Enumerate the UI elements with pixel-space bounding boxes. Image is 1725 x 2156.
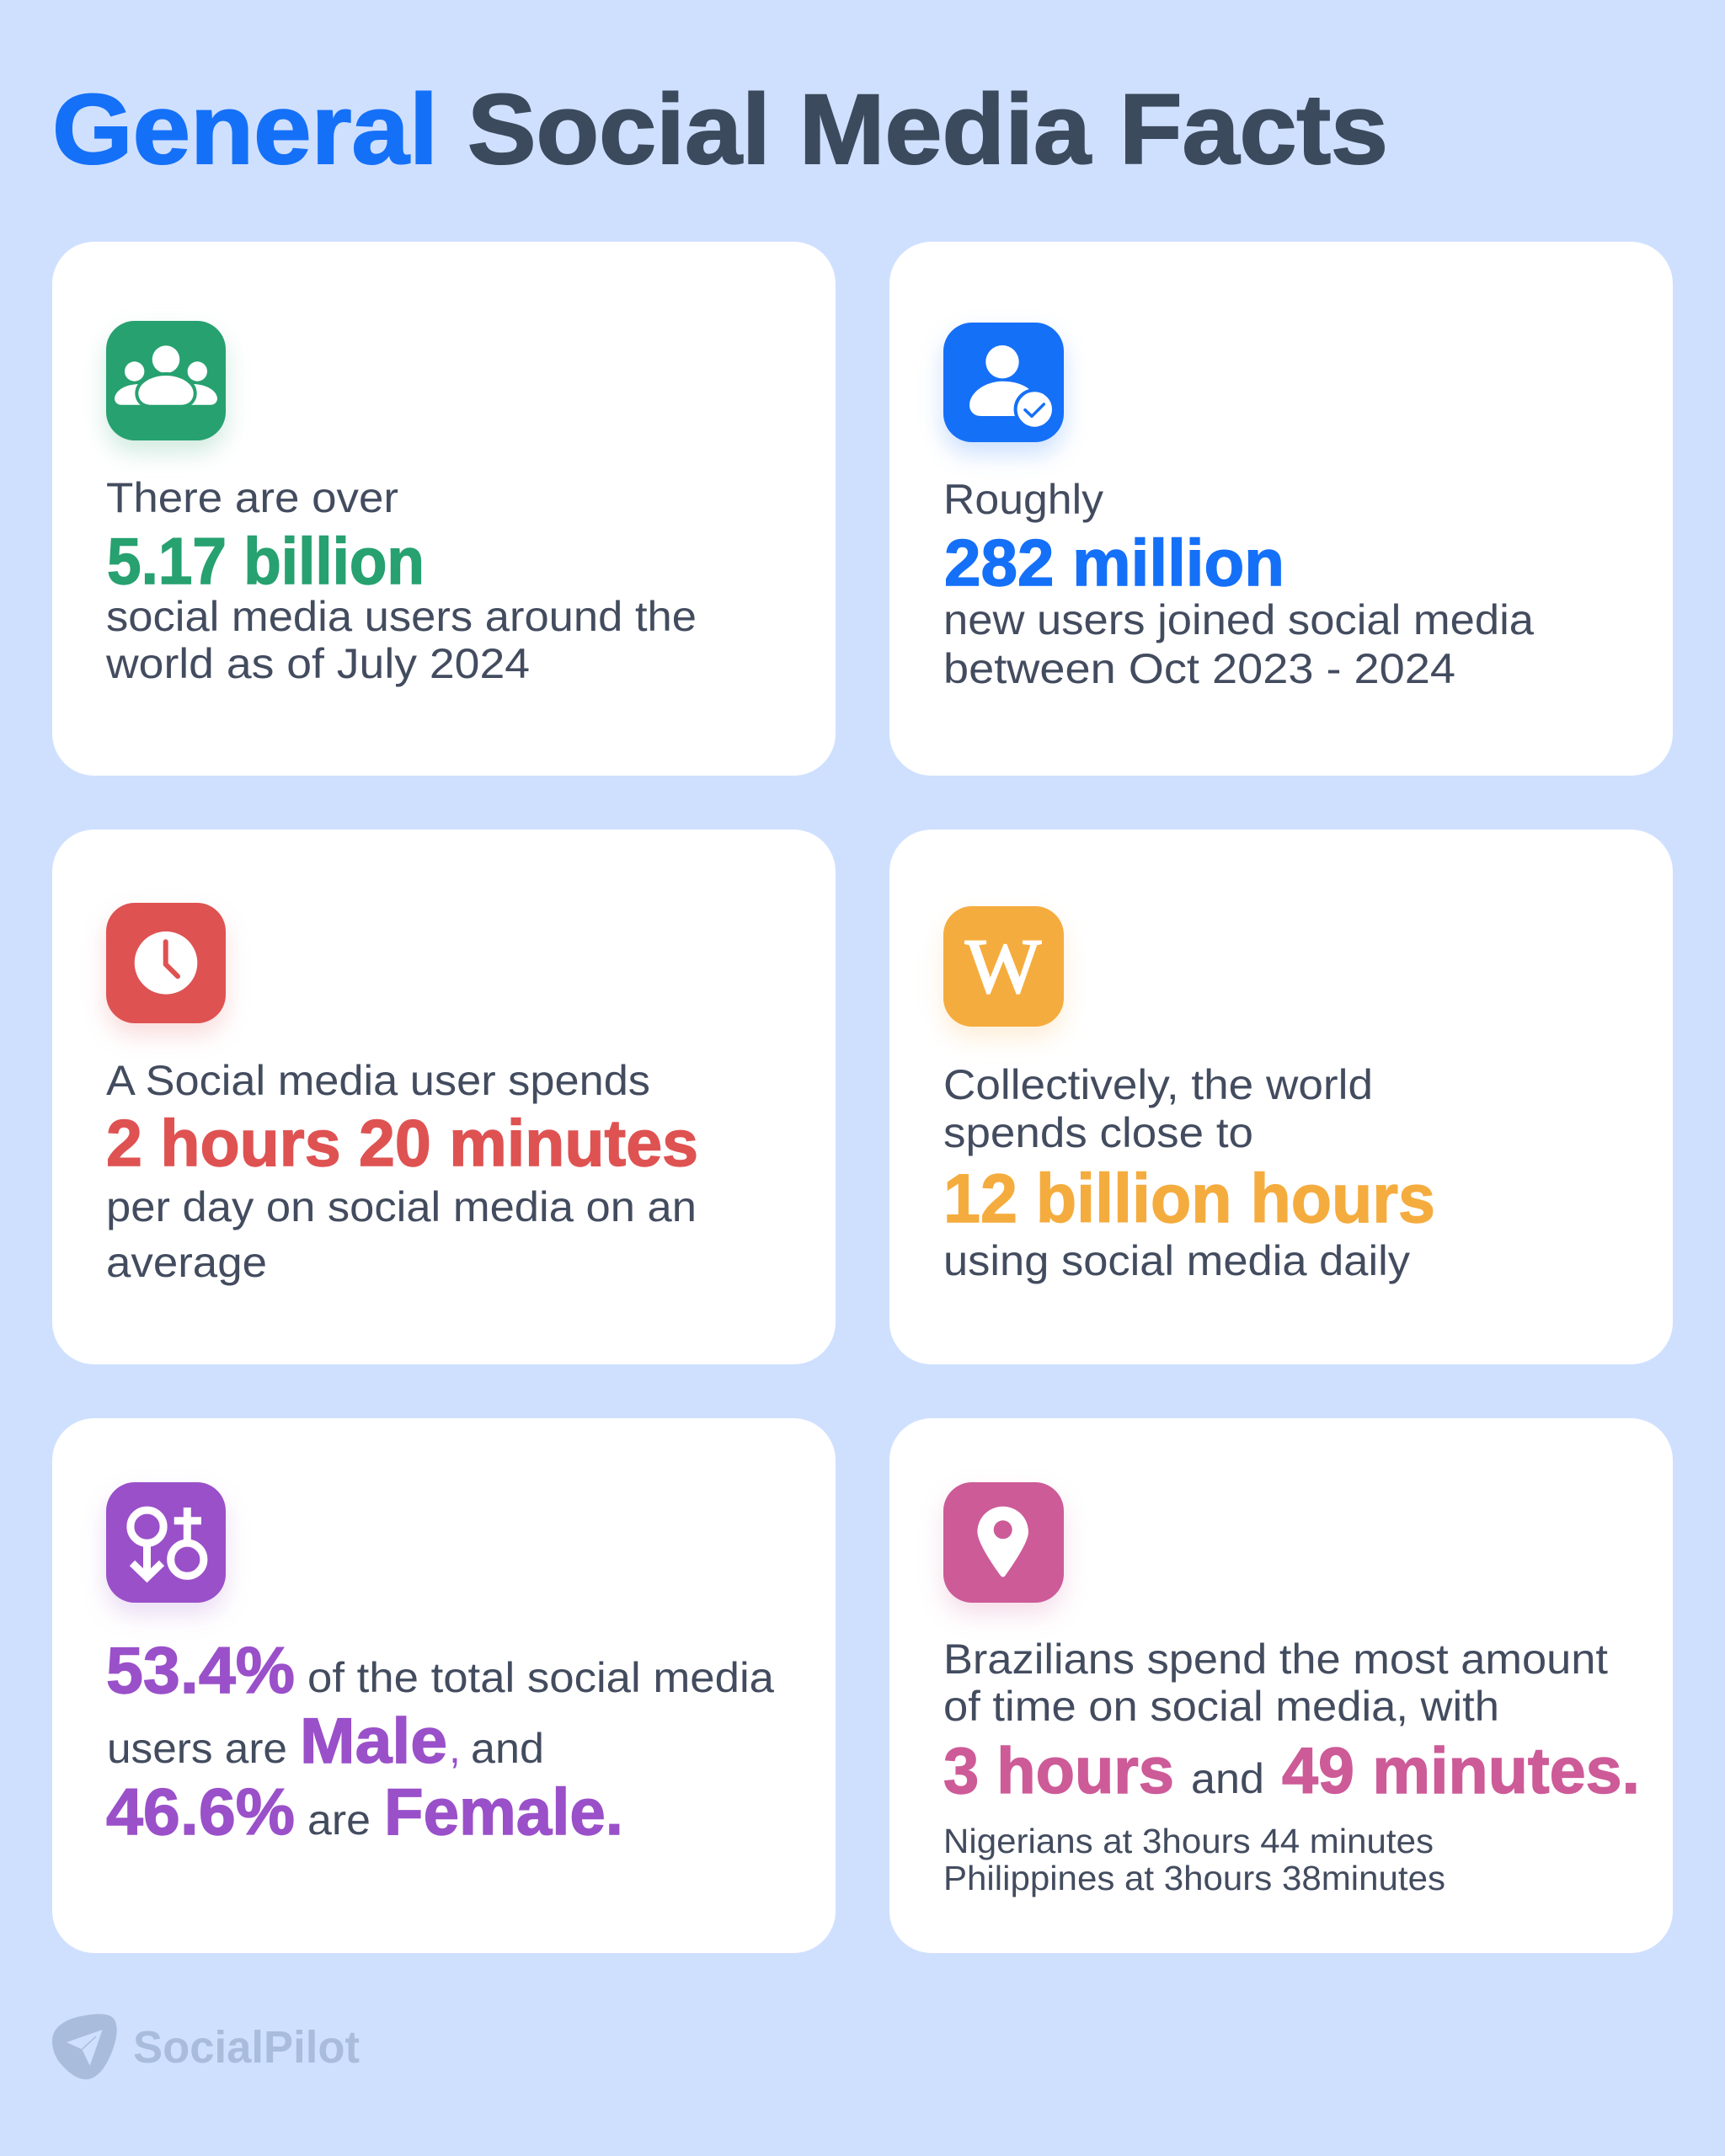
text block: 2 hours 20 minutes: A Social media user spends <box>106 1057 650 1104</box>
title: General <box>52 74 438 185</box>
text block: 2 hours 20 minutes: average <box>106 1239 267 1286</box>
text block: gender percentages: 46.6% <box>106 1774 295 1849</box>
panel: new users <box>889 242 1673 776</box>
logo: SocialPilot: SocialPilot <box>133 2022 360 2073</box>
text block: Brazil time: Brazilians spend the most amount <box>943 1636 1608 1683</box>
text block: Brazil time <box>943 1636 1640 1807</box>
text block: other countries: Nigerians at 3hours 44 minutes <box>943 1822 1434 1860</box>
icon: group of people <box>106 321 226 440</box>
panel: total users <box>52 242 836 776</box>
icon: verified user <box>943 323 1064 442</box>
text block: 282 million: between Oct 2023 - 2024 <box>943 645 1455 692</box>
text block: 12 billion hours: 12 billion hours <box>943 1161 1435 1237</box>
text block: 282 million: Roughly <box>943 476 1103 523</box>
text block: other countries <box>943 1822 1445 1897</box>
panel: collective time <box>889 830 1673 1364</box>
panel: daily time per user <box>52 830 836 1364</box>
text block: gender percentages: Male <box>300 1705 447 1777</box>
icon: location pin <box>943 1482 1064 1603</box>
text block: gender percentages: of the total social media <box>307 1654 774 1701</box>
icon: clock <box>106 903 226 1023</box>
icon: W letter: W <box>965 923 1041 1009</box>
text block: 12 billion hours <box>943 1061 1435 1284</box>
text block: 5.17 billion users: social media users around the <box>106 593 697 640</box>
text block: gender percentages: and <box>471 1725 544 1772</box>
text block: 5.17 billion users: 5.17 billion <box>107 524 425 598</box>
text block: 12 billion hours: using social media daily <box>943 1237 1410 1284</box>
text block: Brazil time: of time on social media, with <box>943 1683 1499 1730</box>
text block: Brazil time: 3 hours <box>943 1735 1174 1807</box>
text block: 282 million: 282 million <box>944 526 1284 600</box>
text block: 12 billion hours: spends close to <box>943 1109 1253 1156</box>
text block: 2 hours 20 minutes <box>106 1057 698 1286</box>
text block: gender percentages: , <box>449 1725 461 1772</box>
text block: 5.17 billion users: There are over <box>106 474 398 521</box>
title: Social Media Facts <box>467 74 1388 185</box>
text block: gender percentages: users are <box>107 1725 287 1772</box>
text block: gender percentages <box>106 1633 774 1849</box>
text block: gender percentages: Female. <box>384 1774 623 1849</box>
text block: 2 hours 20 minutes: per day on social media on an <box>106 1183 697 1230</box>
text block: gender percentages: are <box>307 1796 371 1844</box>
icon: gender symbols <box>106 1482 226 1603</box>
text block: Brazil time: and <box>1191 1755 1264 1802</box>
logo: SocialPilot <box>52 2014 360 2079</box>
text block: 5.17 billion users <box>105 474 697 687</box>
title <box>52 74 1388 185</box>
text block: 5.17 billion users: world as of July 2024 <box>105 640 530 687</box>
text block: 12 billion hours: Collectively, the world <box>943 1061 1373 1108</box>
panel: countries by time <box>889 1418 1673 1953</box>
text block: other countries: Philippines at 3hours 38minutes <box>943 1859 1445 1897</box>
text block: gender percentages: 53.4% <box>106 1633 295 1707</box>
text block: 282 million <box>943 476 1534 692</box>
text block: 2 hours 20 minutes: 2 hours 20 minutes <box>106 1106 698 1180</box>
text block: 282 million: new users joined social media <box>943 596 1534 643</box>
panel: gender split <box>52 1418 836 1953</box>
text block: Brazil time: 49 minutes. <box>1282 1735 1640 1807</box>
icon: W letter <box>943 906 1064 1027</box>
